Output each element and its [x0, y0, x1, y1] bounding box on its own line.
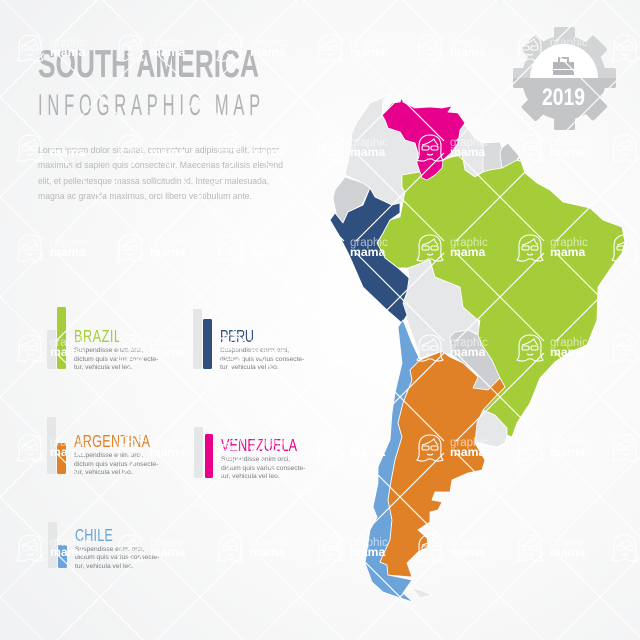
watermark logos: graphic: [150, 37, 188, 49]
legend: Peru: [193, 309, 304, 371]
watermark logos: mama: [50, 545, 85, 559]
watermark logos: graphic: [550, 337, 588, 349]
watermark logos: graphic: [350, 237, 388, 249]
watermark logos: graphic: [250, 537, 288, 549]
country: Guyana: [452, 125, 484, 177]
watermark logos: graphic: [450, 37, 488, 49]
legend: Chile: CHILE: [75, 526, 113, 546]
legend: Brazil: dictum quis varius consecte-: [74, 356, 158, 363]
watermark logos: graphic: [150, 137, 188, 149]
watermark logos: mama: [50, 145, 85, 159]
legend: Argentina: Suspendisse enim orci,: [74, 452, 143, 459]
watermark logos: mama: [250, 245, 285, 259]
watermark logos: graphic: [50, 37, 88, 49]
watermark logos: graphic: [450, 337, 488, 349]
watermark logos: graphic: [550, 537, 588, 549]
legend: Brazil: [47, 307, 158, 371]
legend: Chile: Suspendisse enim orci,: [75, 546, 144, 553]
watermark logos: graphic: [150, 337, 188, 349]
watermark logos: mama: [450, 45, 485, 59]
legend: Brazil: BRAZIL: [74, 327, 121, 347]
watermark logos: mama: [250, 445, 285, 459]
watermark logos: graphic: [250, 37, 288, 49]
watermark logos: graphic: [50, 337, 88, 349]
watermark logos: graphic: [350, 137, 388, 149]
watermark logos: graphic: [450, 437, 488, 449]
legend: Argentina: dictum quis varius consecte-: [74, 461, 158, 468]
watermark logos: graphic: [350, 37, 388, 49]
country: French Guiana: [500, 143, 520, 168]
country: Bolivia: [403, 260, 480, 358]
country: Brazil: [377, 155, 625, 437]
legend: Venezuela: dictum quis varius consecte-: [221, 465, 305, 472]
watermark logos: mama: [550, 345, 585, 359]
legend: Brazil: Suspendisse enim orci,: [74, 347, 143, 354]
watermark logos: mama: [450, 445, 485, 459]
watermark logos: mama: [150, 445, 185, 459]
legend: Chile: tur, vehicula vel leo.: [75, 563, 134, 570]
watermark logos: mama: [150, 45, 185, 59]
country: Ecuador: [333, 177, 370, 223]
watermark logos: mama: [150, 345, 185, 359]
country: Venezuela: [382, 97, 465, 180]
intro paragraph: magna ac gravida maximus, orci libero vestibulum ante.: [38, 191, 252, 202]
watermark logos: graphic: [550, 437, 588, 449]
legend: Argentina: ARGENTINA: [74, 432, 151, 452]
watermark logos: graphic: [250, 237, 288, 249]
country: Paraguay: [450, 330, 500, 392]
watermark logos: graphic: [150, 437, 188, 449]
watermark logos: mama: [150, 545, 185, 559]
watermark logos: [17, 35, 638, 561]
map: South America: [330, 94, 625, 602]
legend: Peru: Suspendisse enim orci,: [220, 347, 289, 354]
watermark logos: graphic: [50, 137, 88, 149]
legend: Peru: PERU: [220, 327, 254, 347]
watermark logos: mama: [350, 145, 385, 159]
legend: Peru: tur, vehicula vel leo.: [220, 364, 279, 371]
legend: Peru: dictum quis varius consecte-: [220, 356, 304, 363]
icon: briefcase: [553, 57, 574, 75]
watermark logos: mama: [550, 145, 585, 159]
watermark logos: mama: [50, 245, 85, 259]
watermark logos: graphic: [50, 537, 88, 549]
watermark logos: graphic: [150, 237, 188, 249]
watermark logos: graphic: [50, 437, 88, 449]
subtitle: INFOGRAPHIC MAP: [38, 89, 260, 122]
legend: Venezuela: VENEZUELA: [221, 436, 298, 456]
watermark logos: mama: [350, 545, 385, 559]
watermark logos: mama: [350, 445, 385, 459]
watermark logos: graphic: [550, 237, 588, 249]
country: Uruguay: [475, 410, 507, 447]
watermark logos: mama: [450, 145, 485, 159]
intro paragraph: maximus id sapien quis consectetur. Maecenas facilisis eleifend: [38, 160, 283, 171]
watermark logos: graphic: [550, 137, 588, 149]
watermark logos: graphic: [350, 337, 388, 349]
watermark logos: mama: [150, 245, 185, 259]
watermark logos: graphic: [50, 237, 88, 249]
watermark logos: mama: [50, 345, 85, 359]
legend: Venezuela: [194, 427, 305, 480]
watermark logos: mama: [250, 545, 285, 559]
country: Colombia: [345, 94, 422, 205]
country: Peru: [330, 188, 409, 323]
watermark logos: graphic: [150, 537, 188, 549]
country: Chile: [365, 320, 420, 602]
watermark logos: graphic: [250, 437, 288, 449]
watermark logos: graphic: [550, 37, 588, 49]
intro paragraph: elit, et pellentesque massa sollicitudin id. Integer malesuada,: [38, 176, 269, 187]
watermark logos: graphic: [450, 137, 488, 149]
watermark logos: mama: [250, 345, 285, 359]
watermark logos: mama: [550, 245, 585, 259]
intro paragraph: [38, 145, 283, 202]
watermark logos: graphic: [450, 237, 488, 249]
watermark logos: graphic: [350, 537, 388, 549]
watermark logos: graphic: [250, 337, 288, 349]
watermark logos: mama: [250, 45, 285, 59]
watermark logos: mama: [550, 545, 585, 559]
watermark logos: mama: [550, 45, 585, 59]
legend: Brazil: tur, vehicula vel leo.: [74, 364, 133, 371]
watermark logos: graphic: [350, 437, 388, 449]
watermark logos: mama: [350, 45, 385, 59]
country: Argentina: [380, 352, 505, 577]
legend: Venezuela: tur, vehicula vel leo.: [221, 473, 280, 480]
watermark logos: mama: [450, 545, 485, 559]
legend: Chile: [48, 522, 159, 570]
watermark logos: mama: [350, 345, 385, 359]
watermark logos: mama: [450, 345, 485, 359]
legend: Argentina: tur, vehicula vel leo.: [74, 469, 133, 476]
watermark logos: graphic: [450, 537, 488, 549]
watermark logos: mama: [550, 445, 585, 459]
legend: Venezuela: Suspendisse enim orci,: [221, 456, 290, 463]
watermark logos: mama: [450, 245, 485, 259]
watermark logos: mama: [50, 445, 85, 459]
island: Tierra del Fuego: [412, 588, 432, 598]
watermark logos: mama: [350, 245, 385, 259]
intro paragraph: Lorem ipsum dolor sit amet, consectetur adipiscing elit. Integer: [38, 145, 279, 156]
watermark logos: mama: [50, 45, 85, 59]
year: 2019: [542, 84, 585, 111]
watermark logos: mama: [250, 145, 285, 159]
icon: gear 2019 badge: [513, 27, 616, 130]
title: SOUTH AMERICA: [38, 43, 259, 86]
country: Suriname: [483, 142, 502, 172]
legend: Chile: dictum quis varius consecte-: [75, 554, 159, 561]
legend: Argentina: [47, 417, 158, 476]
watermark logos: graphic: [250, 137, 288, 149]
watermark logos: mama: [150, 145, 185, 159]
